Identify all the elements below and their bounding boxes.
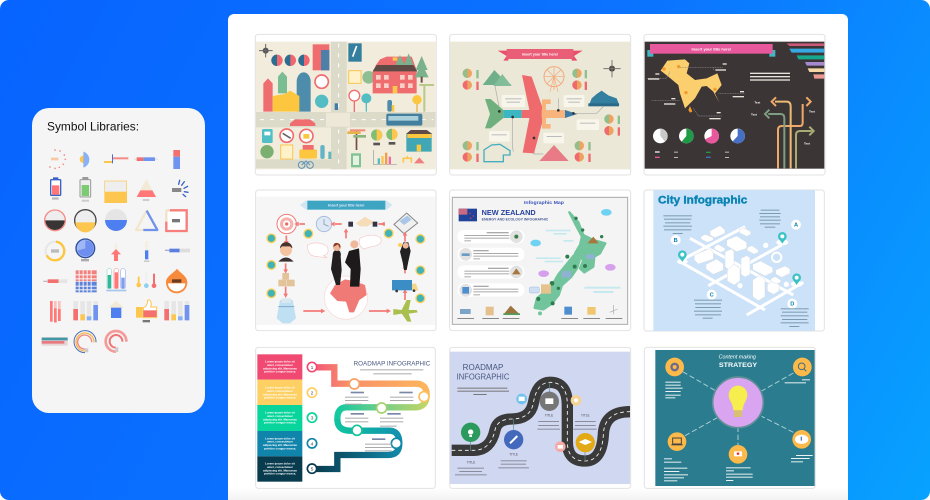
title ribbon	[498, 49, 583, 61]
heading: city infographic: City Infographic	[658, 194, 747, 206]
panel: symbol libraries	[32, 108, 205, 413]
card: roadmap infographic 1: amet, consectetuer	[267, 440, 294, 444]
title banner: Insert your title here!	[328, 203, 365, 207]
heading: content making strategy: STRATEGY	[719, 363, 757, 369]
card: business cycle template	[256, 190, 436, 331]
card: roadmap infographic 1: porttitor congue massa.	[264, 446, 296, 450]
card: city infographic template: A	[794, 223, 798, 229]
asphalt road	[452, 382, 630, 461]
globe	[324, 276, 368, 319]
card: content strategy template	[644, 347, 815, 488]
card: roadmap infographic 2: TITLE	[545, 414, 553, 418]
card: roadmap infographic 1: Lorem ipsum dolor sit	[265, 436, 295, 440]
card: roadmap infographic 2: TITLE	[467, 460, 475, 464]
card: city map template	[255, 34, 436, 175]
card: india map template: Text	[804, 142, 810, 146]
title banner	[300, 201, 393, 210]
card: roadmap infographic 1: porttitor congue massa.	[264, 472, 296, 476]
card: roadmap infographic 1: amet, consectetuer	[267, 414, 294, 418]
card: roadmap infographic 2	[450, 347, 631, 488]
heading: symbol libraries: Symbol Libraries:	[47, 120, 139, 134]
card: roadmap infographic 1: Lorem ipsum dolor sit	[265, 360, 295, 364]
card: roadmap infographic 1: 4	[311, 441, 314, 447]
card: roadmap infographic 1: Lorem ipsum dolor sit	[265, 462, 295, 466]
new zealand map	[569, 212, 605, 272]
card: roadmap infographic 1: porttitor congue massa.	[264, 421, 296, 425]
title banner	[647, 44, 775, 57]
card: airplane template	[450, 34, 631, 175]
card: roadmap infographic 1: adipiscing elit. Maecenas	[263, 366, 297, 370]
card: roadmap infographic 1: adipiscing elit. Maecenas	[263, 468, 297, 472]
heading: roadmap infographic: ROADMAP INFOGRAPHIC	[354, 361, 430, 368]
card: roadmap infographic 1: adipiscing elit. Maecenas	[263, 417, 297, 421]
card: roadmap infographic 1: 3	[311, 416, 314, 422]
card: roadmap infographic 2: TITLE	[509, 453, 518, 457]
card: roadmap infographic 1: amet, consectetuer	[267, 363, 294, 367]
card: city infographic template: C	[710, 293, 714, 299]
card: city infographic template: D	[790, 302, 794, 308]
card: roadmap infographic 1: amet, consectetuer	[267, 389, 294, 393]
heading: roadmap infographic	[457, 363, 510, 381]
card: roadmap infographic 1: 1	[311, 365, 314, 371]
light bulb	[729, 386, 747, 417]
winding road	[313, 367, 427, 469]
card: india map template: Text	[809, 110, 815, 114]
card: new zealand template: ENERGY AND ECOLOGY INFOGRAPHIC	[482, 218, 549, 222]
title ribbon: Insert your title here!	[522, 52, 558, 56]
symbol icon grid	[42, 149, 190, 353]
card: roadmap infographic 1: amet, consectetuer	[267, 465, 294, 469]
card: city infographic template: B	[674, 238, 678, 244]
card: roadmap infographic 1: Lorem ipsum dolor sit	[265, 411, 295, 415]
heading: infographic map: Infographic Map	[524, 200, 564, 206]
card: india map template: Text	[751, 112, 757, 116]
heading: new zealand: NEW ZEALAND	[482, 208, 536, 217]
card: roadmap infographic 1: porttitor congue massa.	[264, 370, 296, 374]
main white panel	[228, 14, 848, 500]
card: new zealand template	[450, 190, 631, 331]
card: roadmap infographic 1: Lorem ipsum dolor sit	[265, 386, 295, 390]
airplane	[485, 75, 577, 153]
heading: content making strategy: Content making	[719, 355, 756, 361]
heading: roadmap infographic: INFOGRAPHIC	[457, 372, 510, 381]
card: roadmap infographic 1: 5	[311, 467, 314, 473]
india map	[661, 59, 722, 108]
card: roadmap infographic 2: TITLE	[581, 414, 590, 418]
heading: roadmap infographic: ROADMAP	[463, 363, 503, 372]
panel bottom fade	[228, 488, 848, 500]
card: roadmap infographic 1: adipiscing elit. Maecenas	[263, 392, 297, 396]
card: india map template	[644, 34, 825, 175]
card: city infographic template	[644, 190, 824, 331]
card: roadmap infographic 1: 2	[311, 391, 314, 397]
card: india map template: Text	[754, 101, 760, 105]
title banner: Insert your title here!	[692, 46, 731, 51]
heading: content making strategy	[719, 355, 757, 369]
card: roadmap infographic 1	[256, 347, 435, 488]
card: roadmap infographic 1: porttitor congue massa.	[264, 396, 296, 400]
card: roadmap infographic 1: adipiscing elit. Maecenas	[263, 443, 297, 447]
